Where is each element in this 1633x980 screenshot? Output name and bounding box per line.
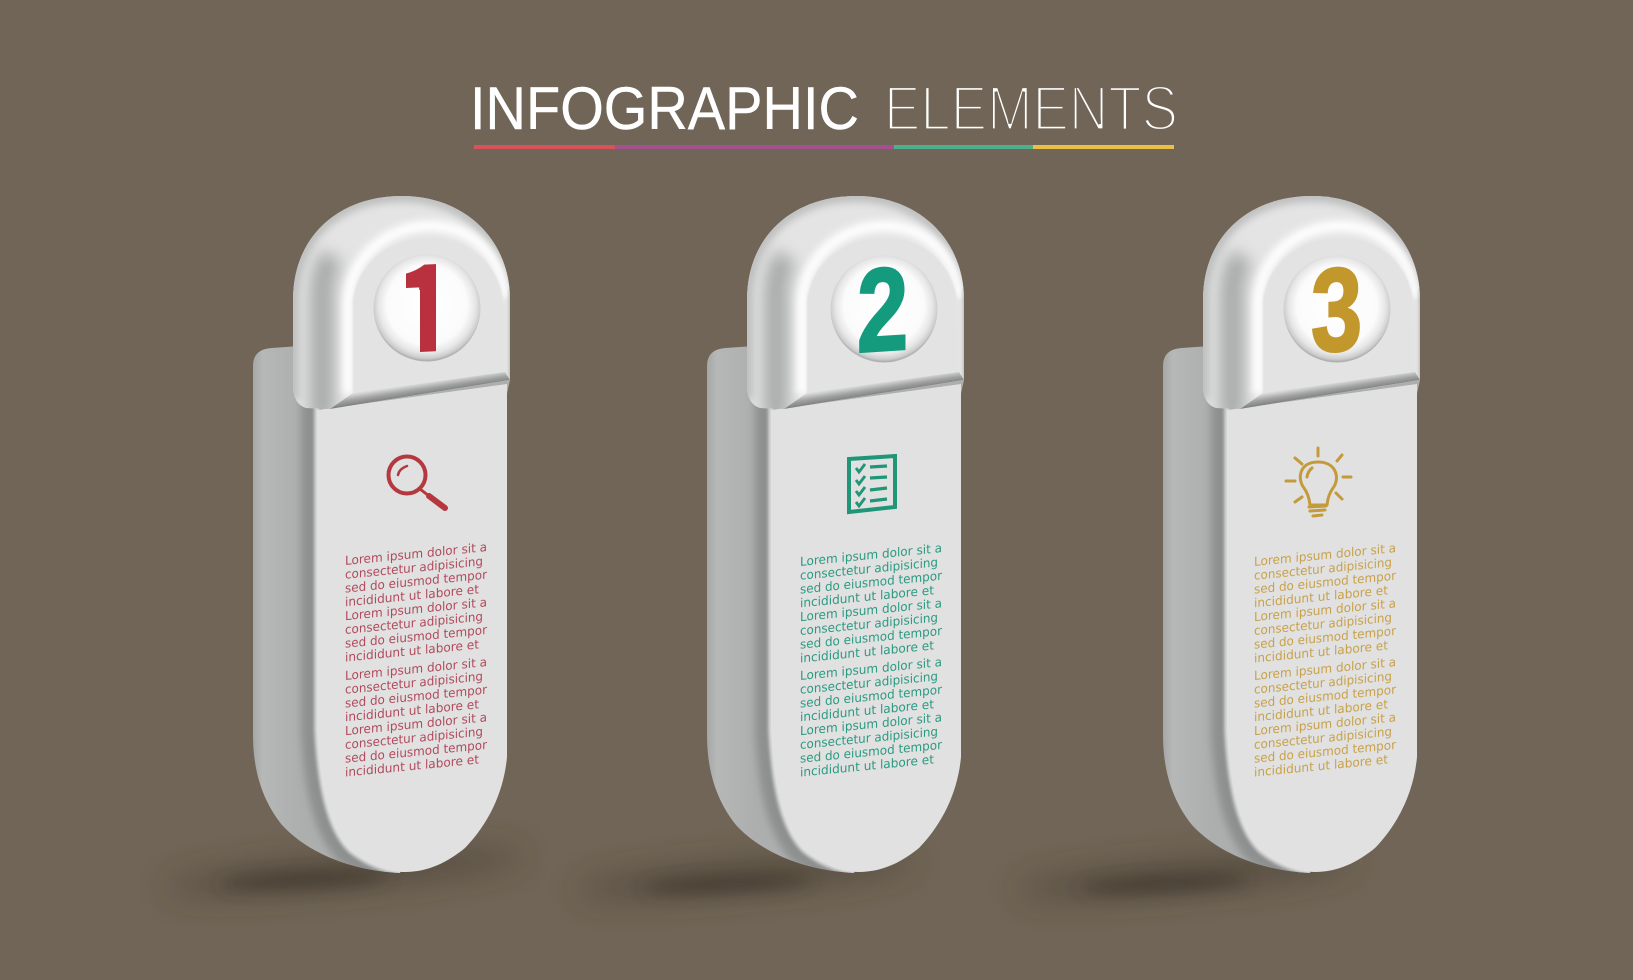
panel 2 number: 2 <box>857 243 908 378</box>
panel 2 cap <box>747 196 964 409</box>
panel 1 text: sed do eiusmod tempor <box>345 622 488 651</box>
panel 2 number disc <box>830 256 938 362</box>
panel 1 text: Lorem ipsum dolor sit a <box>345 709 487 738</box>
panel 3 text: incididunt ut labore et <box>1254 696 1388 724</box>
title <box>470 74 1178 144</box>
panel 3 text: Lorem ipsum dolor sit a <box>1254 540 1396 569</box>
panel 2 text: incididunt ut labore et <box>800 696 934 724</box>
panel 1 text: consectetur adipisicing <box>345 668 483 697</box>
panel 2 text: Lorem ipsum dolor sit a <box>800 595 942 624</box>
panel 3 text: incididunt ut labore et <box>1254 637 1388 666</box>
panel 1 text: incididunt ut labore et <box>345 751 479 780</box>
panel 3 text: sed do eiusmod tempor <box>1254 682 1397 711</box>
panel 2 text: Lorem ipsum dolor sit a <box>800 654 942 683</box>
panel 2 text: consectetur adipisicing <box>800 610 938 638</box>
panel 2 text <box>800 540 943 780</box>
panel 1 text: Lorem ipsum dolor sit a <box>345 654 487 683</box>
panel 2 text: consectetur adipisicing <box>800 554 938 583</box>
panel 1 cap <box>293 196 510 409</box>
panel 3 text <box>1254 540 1397 780</box>
panel 2 text: sed do eiusmod tempor <box>800 682 943 711</box>
panel 2 text: sed do eiusmod tempor <box>800 568 943 597</box>
panel 3 <box>1160 190 1425 880</box>
panel 3 text: consectetur adipisicing <box>1254 668 1392 697</box>
panel 1 number: 1 <box>397 214 456 387</box>
icon: light bulb <box>1286 448 1351 516</box>
panel 2 text: consectetur adipisicing <box>800 724 938 752</box>
panel 1 text: Lorem ipsum dolor sit a <box>345 539 487 568</box>
panel 2 text: consectetur adipisicing <box>800 668 938 697</box>
panel 1 number disc <box>374 254 480 362</box>
panel 2 text: incididunt ut labore et <box>800 637 934 666</box>
panel 3 body side <box>1160 340 1422 880</box>
panel 3 text: sed do eiusmod tempor <box>1254 737 1397 766</box>
panel 1 text: sed do eiusmod tempor <box>345 682 488 711</box>
panel 1 text: sed do eiusmod tempor <box>345 737 488 766</box>
panel 3 text: Lorem ipsum dolor sit a <box>1254 709 1396 738</box>
panel 2 front face <box>771 384 961 872</box>
panel 1 body side <box>250 340 512 880</box>
panel 3 front face <box>1227 384 1417 872</box>
panel 2 text: Lorem ipsum dolor sit a <box>800 709 942 738</box>
title underline: four colours <box>474 145 1174 149</box>
panel 3 text: incididunt ut labore et <box>1254 751 1388 780</box>
panel 2 text: Lorem ipsum dolor sit a <box>800 540 942 569</box>
icon: magnifying glass <box>388 456 445 508</box>
panel 3 text: Lorem ipsum dolor sit a <box>1254 595 1396 624</box>
panel 3 text: consectetur adipisicing <box>1254 724 1392 752</box>
panel 1 text: Lorem ipsum dolor sit a <box>345 594 487 623</box>
panel 3 text: sed do eiusmod tempor <box>1254 623 1397 652</box>
panel 3 text: Lorem ipsum dolor sit a <box>1254 654 1396 683</box>
panel 1 text: incididunt ut labore et <box>345 636 479 665</box>
title: ELEMENTS <box>884 74 1178 144</box>
panel 1 <box>250 190 515 880</box>
panel 3 text: consectetur adipisicing <box>1254 610 1392 638</box>
panel 1 text <box>345 539 488 780</box>
panel 2 text: sed do eiusmod tempor <box>800 737 943 766</box>
panel 2 text: sed do eiusmod tempor <box>800 623 943 652</box>
panel 2 text: incididunt ut labore et <box>800 751 934 780</box>
panel 1 text: incididunt ut labore et <box>345 581 479 609</box>
panel 3 number: 3 <box>1311 243 1362 378</box>
panel 3 text: sed do eiusmod tempor <box>1254 568 1397 597</box>
panel 1 text: consectetur adipisicing <box>345 553 483 582</box>
panel 2 body side <box>704 340 966 880</box>
panel 1 text: incididunt ut labore et <box>345 696 479 724</box>
floor shadows <box>165 843 1355 904</box>
panel 1 text: consectetur adipisicing <box>345 609 483 637</box>
panel 1 text: consectetur adipisicing <box>345 724 483 752</box>
panel 1 text: sed do eiusmod tempor <box>345 567 488 596</box>
panel 3 cap <box>1203 196 1420 409</box>
panel 3 text: consectetur adipisicing <box>1254 554 1392 583</box>
title: INFOGRAPHIC <box>470 75 859 142</box>
panel 2 text: incididunt ut labore et <box>800 582 934 610</box>
panel 1 front face <box>317 384 507 872</box>
panel 3 text: incididunt ut labore et <box>1254 582 1388 610</box>
panel 3 number disc <box>1284 256 1390 362</box>
icon: checklist <box>849 456 895 512</box>
panel 2 <box>704 190 969 880</box>
